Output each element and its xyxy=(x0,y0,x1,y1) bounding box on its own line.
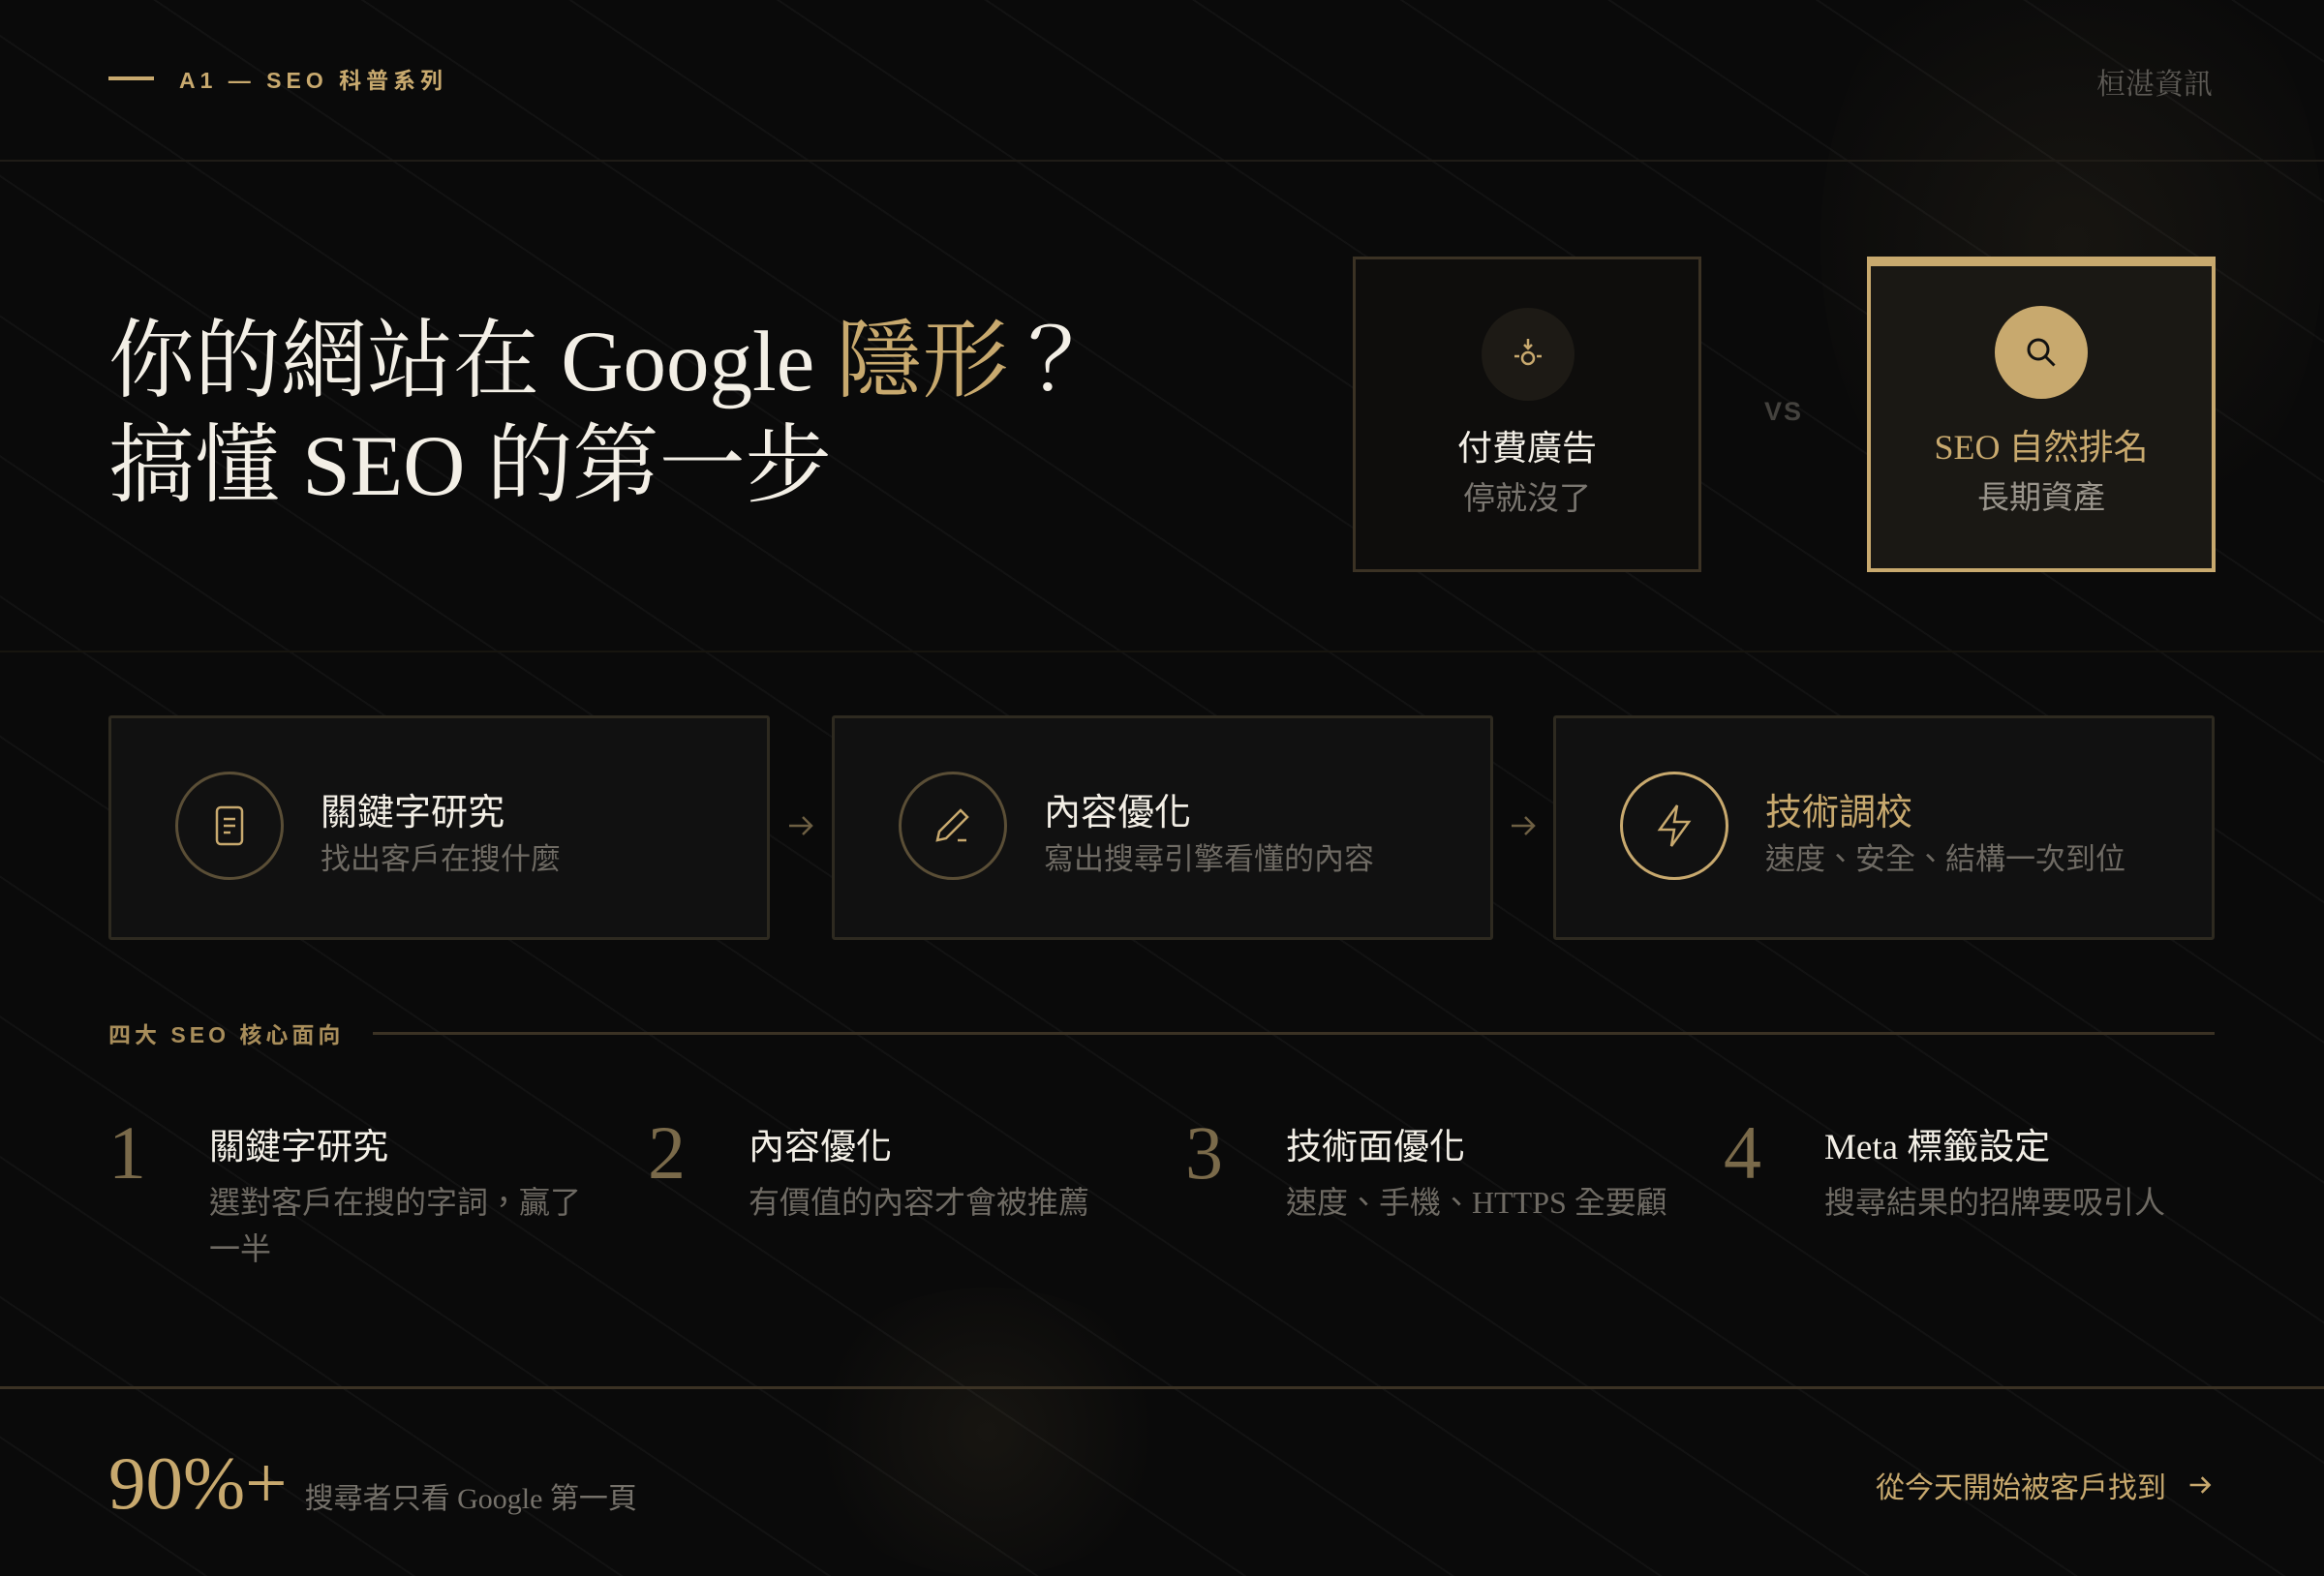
icon: lightning xyxy=(1620,772,1728,880)
text: 技術面優化 xyxy=(1286,1128,1465,1167)
text: Meta 標籤設定 xyxy=(1824,1128,2050,1167)
text: 速度、手機、HTTPS 全要顧 xyxy=(1286,1185,1667,1220)
comparison card: paid ads: 付費廣告 xyxy=(1457,428,1597,468)
vs label: VS xyxy=(1764,397,1803,426)
step 2: content: 寫出搜尋引擎看懂的內容 xyxy=(1044,842,1374,876)
text: 有價值的內容才會被推薦 xyxy=(749,1185,1089,1220)
arrow xyxy=(789,816,813,835)
comparison card: SEO: 長期資產 xyxy=(1977,479,2105,515)
title: 你的網站在 Google 隱形？ xyxy=(108,315,1095,409)
item 4 xyxy=(1724,1110,2165,1220)
item 3 xyxy=(1185,1110,1667,1220)
header: series label: A1 — SEO 科普系列 xyxy=(179,68,447,93)
comparison card: SEO: SEO 自然排名 xyxy=(1934,428,2148,467)
icon: paid ads xyxy=(1482,308,1575,401)
icon: pen xyxy=(899,772,1007,880)
text: 搜尋結果的招牌要吸引人 xyxy=(1824,1185,2165,1220)
step 1: keyword research xyxy=(108,715,770,940)
arrow xyxy=(1512,816,1536,835)
comparison card: paid ads xyxy=(1353,257,1701,572)
header: brand: 桓湛資訊 xyxy=(2096,69,2213,101)
item 2 xyxy=(648,1110,1089,1220)
text: 內容優化 xyxy=(749,1128,892,1167)
title: 搞懂 SEO 的第一步 xyxy=(108,419,832,514)
title xyxy=(108,315,1095,514)
comparison card: paid ads: 停就沒了 xyxy=(1463,480,1591,516)
text: 選對客戶在搜的字詞，贏了一半 xyxy=(209,1185,581,1266)
icon: search xyxy=(1995,306,2088,399)
icon: document xyxy=(175,772,284,880)
text: 2 xyxy=(648,1110,686,1195)
step 2: content xyxy=(832,715,1493,940)
step 2: content: 內容優化 xyxy=(1044,793,1191,833)
step 3: technical xyxy=(1553,715,2215,940)
call to action: 從今天開始被客戶找到 xyxy=(1876,1472,2166,1504)
text: 3 xyxy=(1185,1110,1223,1195)
step 1: keyword research: 關鍵字研究 xyxy=(321,793,505,833)
step 3: technical: 速度、安全、結構一次到位 xyxy=(1765,842,2125,876)
step 3: technical: 技術調校 xyxy=(1765,793,1912,833)
section label: 四大 SEO 核心面向 xyxy=(108,1022,344,1047)
text: 4 xyxy=(1724,1110,1761,1195)
step 1: keyword research: 找出客戶在搜什麼 xyxy=(321,842,561,876)
text: 關鍵字研究 xyxy=(209,1128,388,1167)
item 1 xyxy=(108,1110,581,1266)
section label xyxy=(108,1022,2215,1047)
bottom stat: 90%+ 搜尋者只看 Google 第一頁 xyxy=(108,1441,637,1525)
comparison card: SEO xyxy=(1867,257,2216,572)
text: 1 xyxy=(108,1110,146,1195)
